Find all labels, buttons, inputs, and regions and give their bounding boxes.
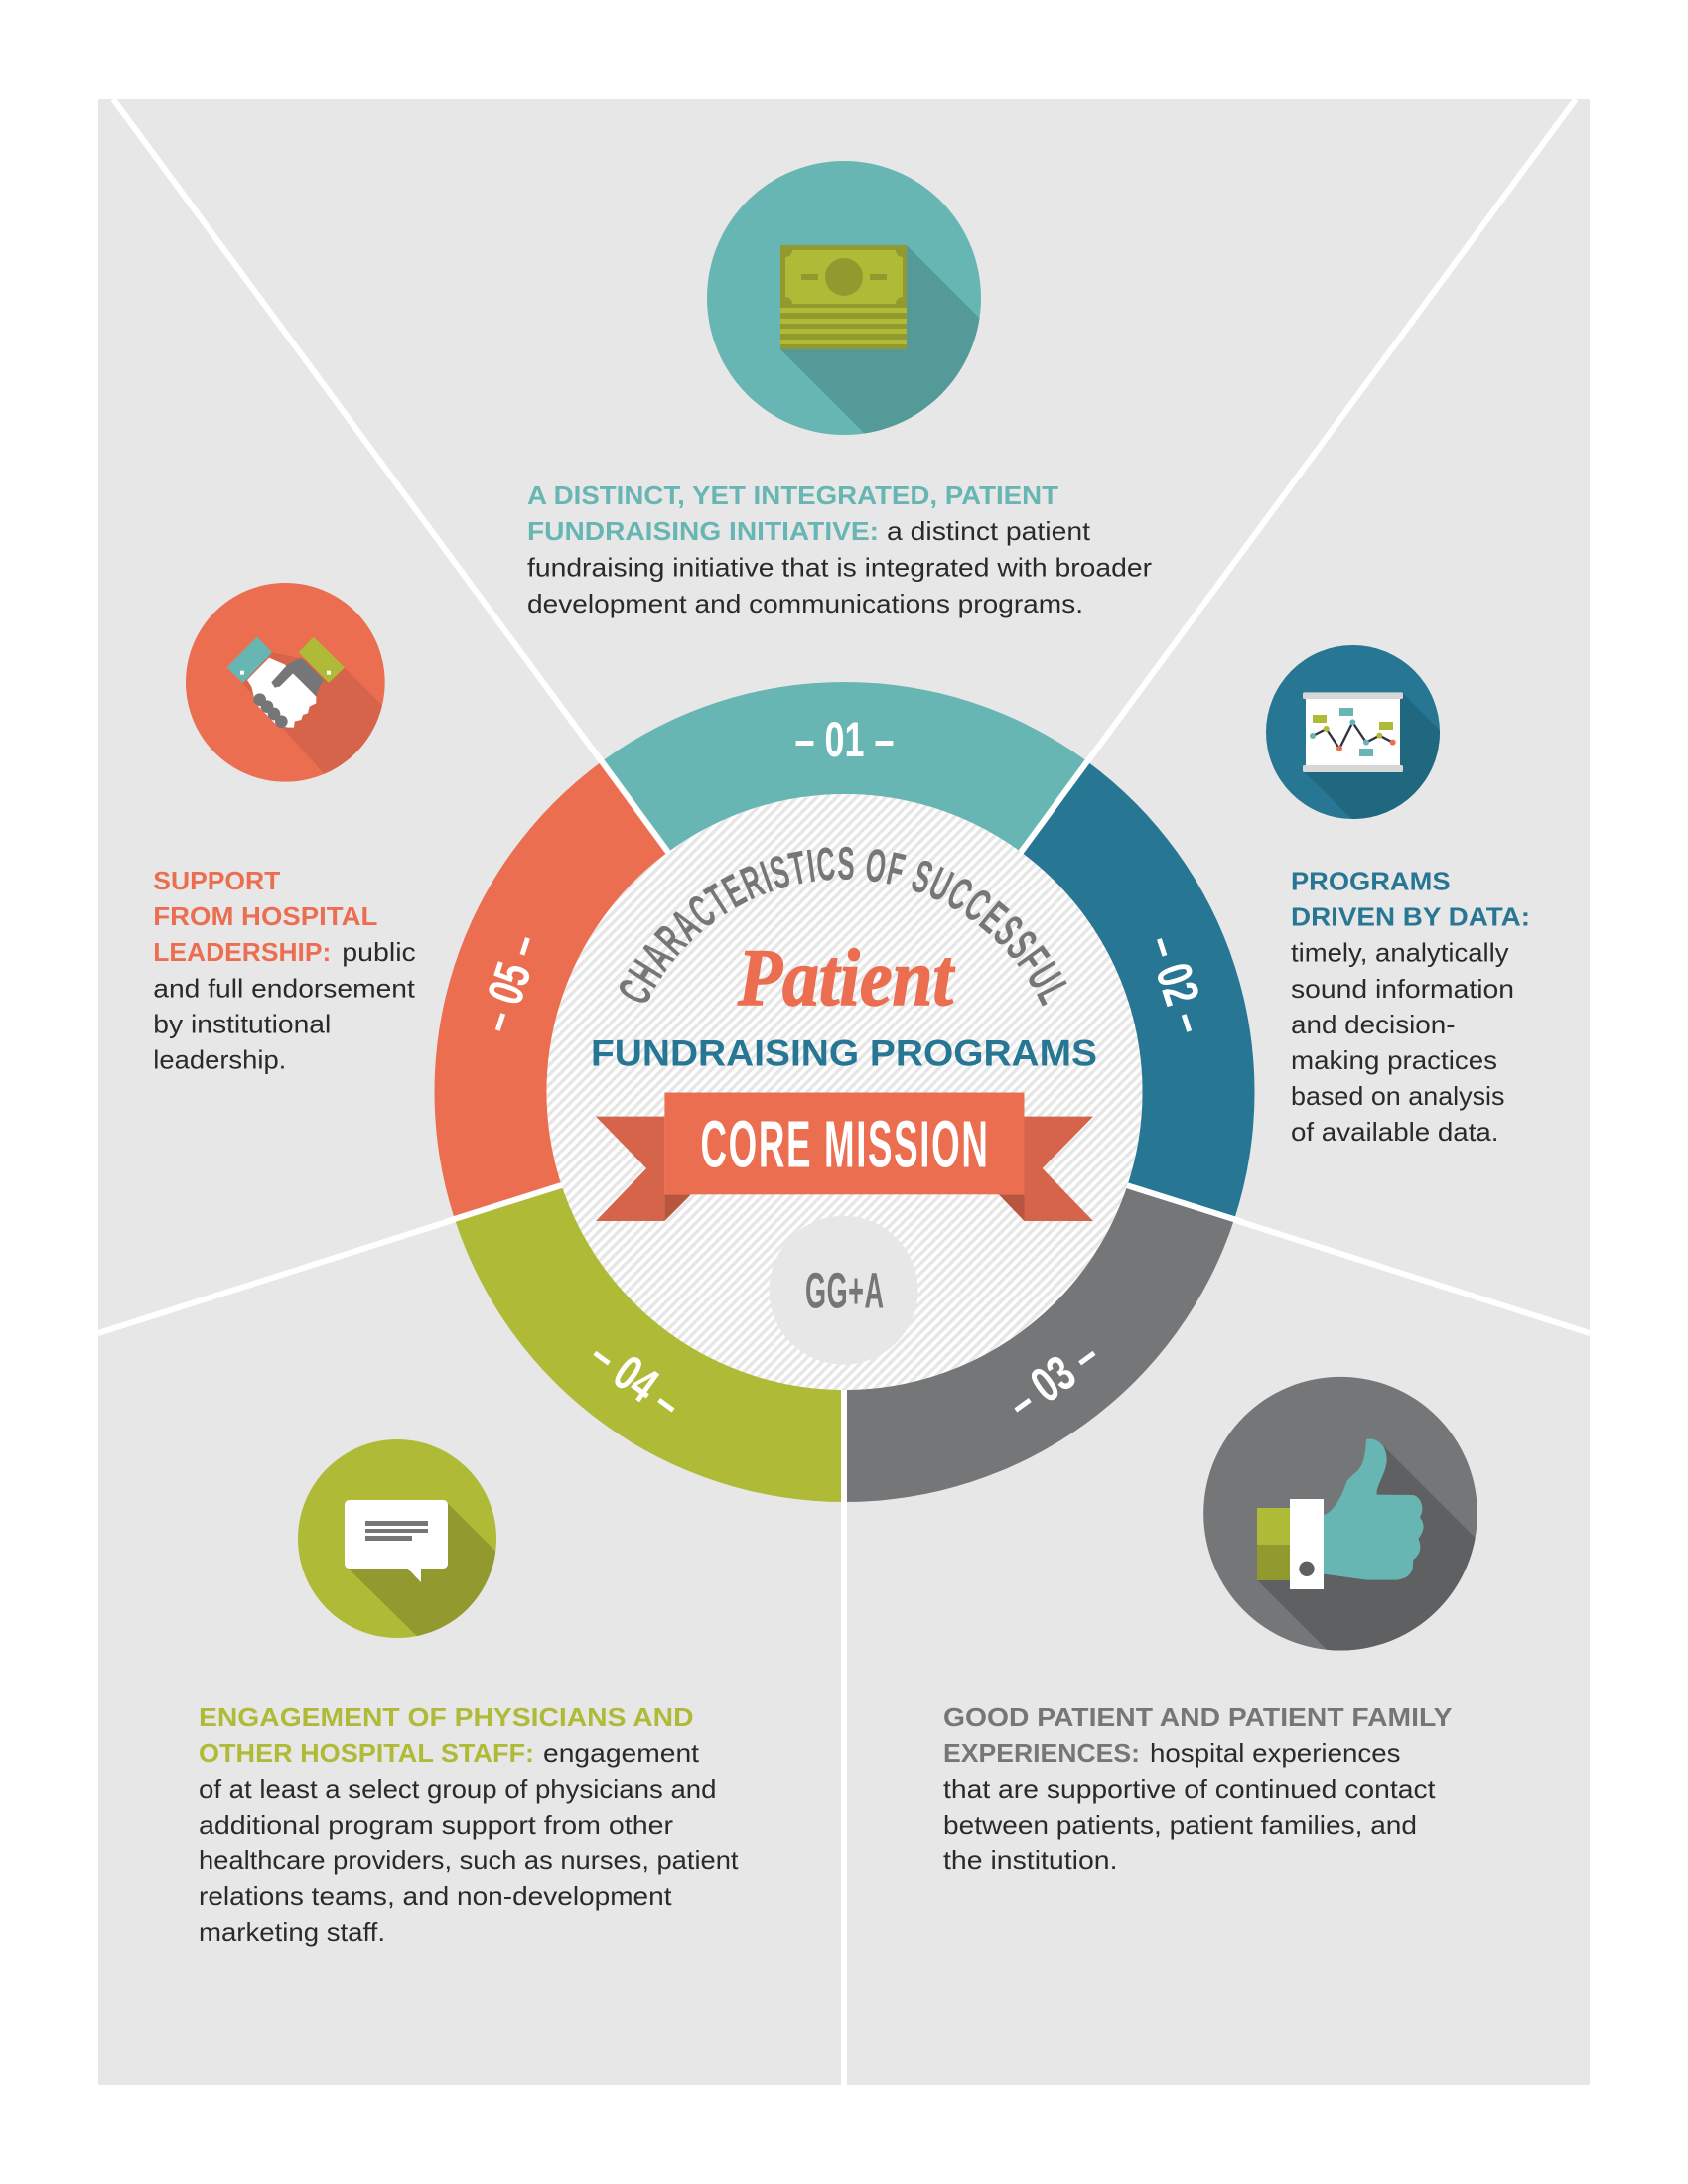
segment 03 [844, 1184, 1234, 1502]
segment gaps [445, 753, 1243, 1509]
hatched centre circle [546, 794, 1142, 1390]
script word: Patient: Patient [737, 932, 955, 1023]
text block: 04 physician engagement: healthcare providers, such as nurses, patient [199, 1845, 739, 1875]
text block: 03 patient experiences: the institution. [943, 1845, 1118, 1875]
text block: 03 patient experiences [943, 1703, 1452, 1875]
text block: 05 leadership support: LEADERSHIP: [153, 937, 331, 967]
text block: 02 data driven: making practices [1291, 1045, 1497, 1075]
text block: 05 leadership support: public [342, 937, 416, 967]
text block: 02 data driven: sound information [1291, 974, 1514, 1004]
number 05: – 05 – [468, 927, 551, 1039]
text block: 05 leadership support: and full endorsement [153, 973, 416, 1003]
text block: 02 data driven: based on analysis [1291, 1081, 1505, 1111]
text block: 05 leadership support [153, 866, 416, 1074]
centre title [591, 846, 1097, 1074]
number 01: – 01 – [794, 712, 894, 767]
text block: 01 distinct initiative: A DISTINCT, YET INTEGRATED, PATIENT [527, 480, 1058, 510]
text block: 02 data driven: timely, analytically [1291, 937, 1509, 967]
logo badge: GG+A: GG+A [805, 1262, 885, 1318]
text block: 02 data driven: of available data. [1291, 1117, 1499, 1147]
text block: 03 patient experiences: GOOD PATIENT AND PATIENT FAMILY [943, 1703, 1452, 1732]
icon: handshake [186, 583, 385, 782]
logo badge: GG+A [769, 1216, 917, 1365]
icon: speech bubble [298, 1439, 496, 1638]
text block: 02 data driven: PROGRAMS [1291, 866, 1450, 895]
text block: 01 distinct initiative: FUNDRAISING INITIATIVE: [527, 516, 879, 546]
ribbon: core mission [596, 1092, 1093, 1221]
text block: 05 leadership support: SUPPORT [153, 866, 280, 895]
curved heading: CHARACTERISTICS OF SUCCESSFUL [620, 846, 1067, 1007]
text block: 04 physician engagement: engagement [543, 1738, 700, 1768]
icon: stack of money [707, 161, 981, 435]
number 03: – 03 – [996, 1327, 1109, 1431]
ribbon label: CORE MISSION [701, 1108, 989, 1181]
text block: 01 distinct initiative: development and communications programs. [527, 589, 1083, 618]
number 04: – 04 – [580, 1327, 693, 1431]
text block: 05 leadership support: FROM HOSPITAL [153, 901, 377, 931]
text block: 04 physician engagement [199, 1703, 739, 1947]
text block: 05 leadership support: by institutional [153, 1009, 331, 1038]
fundraising programs heading: FUNDRAISING PROGRAMS [591, 1032, 1097, 1074]
segment 02 [1021, 761, 1255, 1219]
icon: thumbs up [1203, 1376, 1477, 1650]
ring chart: five numbered segments [434, 682, 1255, 1509]
text block: 04 physician engagement: additional program support from other [199, 1810, 673, 1840]
text block: 02 data driven: and decision- [1291, 1010, 1456, 1039]
text block: 01 distinct initiative: a distinct patient [887, 516, 1091, 546]
number 02: – 02 – [1136, 928, 1219, 1040]
text block: 04 physician engagement: of at least a select group of physicians and [199, 1774, 717, 1804]
text block: 04 physician engagement: marketing staff. [199, 1917, 385, 1947]
text block: 02 data driven: DRIVEN BY DATA: [1291, 901, 1530, 931]
text block: 05 leadership support: leadership. [153, 1044, 286, 1074]
text block: 03 patient experiences: between patients, patient families, and [943, 1810, 1417, 1840]
text block: 01 distinct initiative [527, 480, 1152, 618]
text block: 04 physician engagement: OTHER HOSPITAL STAFF: [199, 1738, 534, 1768]
segment 01 [602, 682, 1087, 852]
text block: 03 patient experiences: EXPERIENCES: [943, 1738, 1140, 1768]
text block: 01 distinct initiative: fundraising initiative that is integrated with broader [527, 552, 1152, 582]
icon: presentation chart [1266, 645, 1440, 819]
text block: 04 physician engagement: ENGAGEMENT OF PHYSICIANS AND [199, 1703, 693, 1732]
text block: 03 patient experiences: that are supportive of continued contact [943, 1774, 1436, 1804]
segment 05 [434, 761, 668, 1219]
text block: 02 data driven [1291, 866, 1530, 1147]
text block: 03 patient experiences: hospital experiences [1150, 1738, 1400, 1768]
segment 04 [455, 1184, 844, 1502]
text block: 04 physician engagement: relations teams, and non-development [199, 1881, 672, 1911]
